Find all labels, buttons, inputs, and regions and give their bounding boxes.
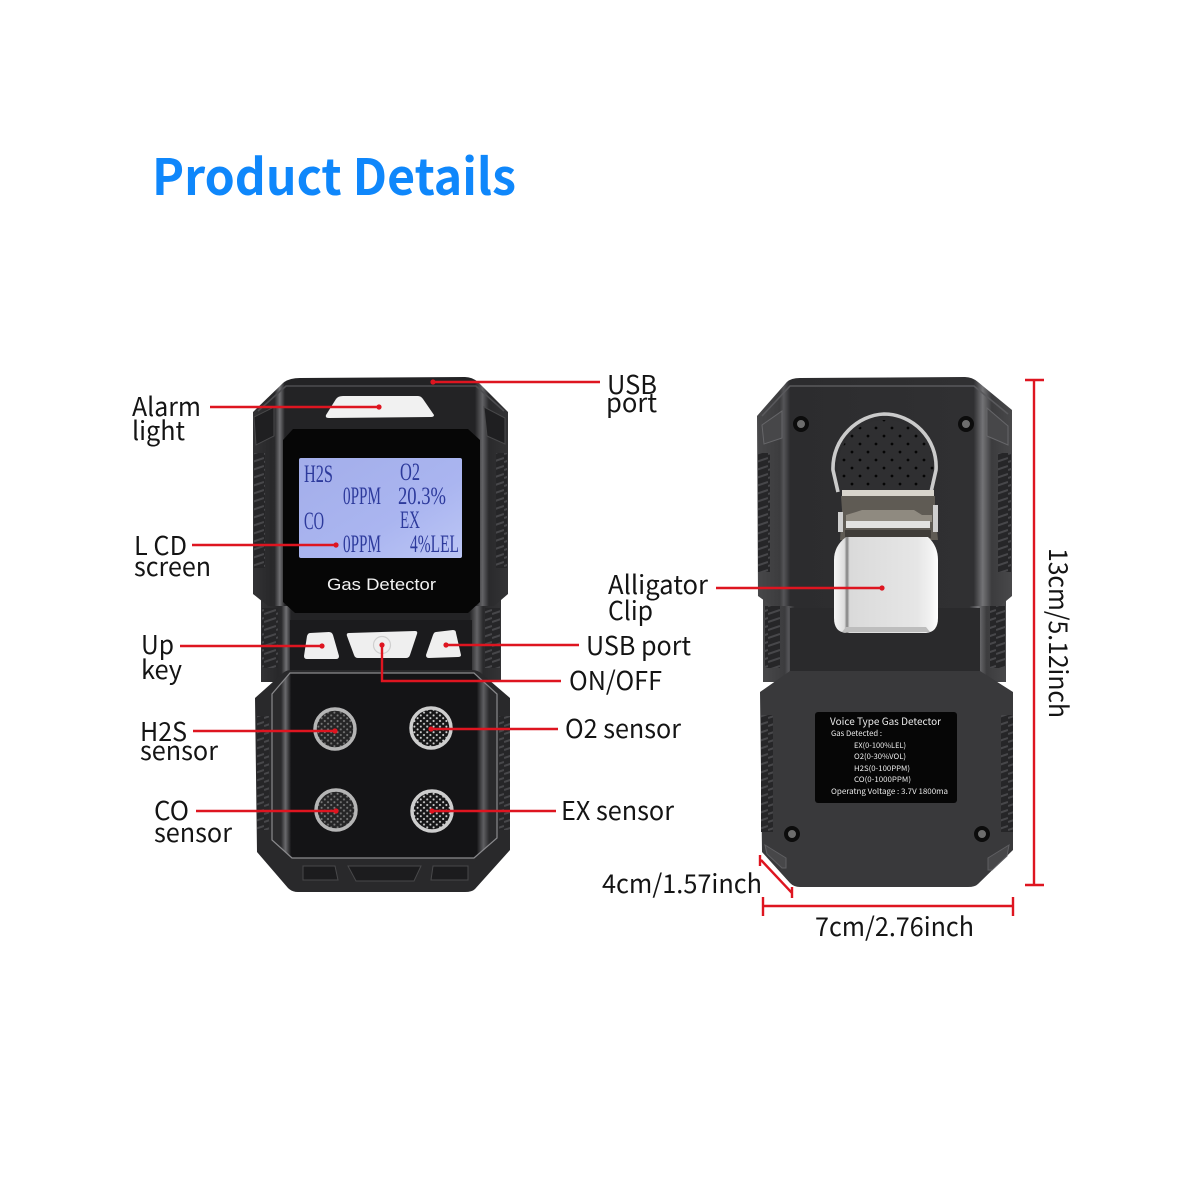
- LCD readings: O2: [400, 459, 420, 486]
- callout: CO sensor: [154, 791, 339, 850]
- LCD readings: 20.3%: [398, 483, 446, 510]
- dimension: depth: [602, 855, 792, 901]
- clip plate: [834, 537, 938, 633]
- screw top left: [795, 418, 807, 430]
- upper side grips: [758, 453, 1011, 572]
- callout: top USB port: [430, 365, 657, 420]
- LCD readings: EX: [400, 507, 420, 534]
- callout: CO sensor: sensor: [154, 813, 233, 850]
- callout: ON/OFF: ON/OFF: [569, 661, 662, 698]
- top edge band: [258, 386, 504, 411]
- callout: USB port key: USB port: [586, 626, 691, 663]
- lower side grips: [257, 716, 510, 830]
- screw bottom right: [976, 828, 988, 840]
- callout: alarm light: Alarm: [132, 387, 201, 424]
- spec text: Operatng Voltage : 3.7V 1800ma: [831, 786, 948, 797]
- middle grip hatching: [262, 608, 500, 668]
- callout: LCD screen: [134, 526, 339, 584]
- callout: LCD screen: screen: [134, 547, 211, 584]
- LCD readings: [304, 459, 459, 558]
- upper body shell: [253, 377, 508, 606]
- upper side grips: [254, 453, 507, 568]
- dimension: width: 7cm/2.76inch: [815, 907, 974, 944]
- alligator clip: [833, 414, 938, 633]
- spec text: CO(0-1000PPM): [854, 774, 911, 785]
- sensor: EX: [412, 791, 452, 831]
- spec text: H2S(0-100PPM): [854, 763, 910, 774]
- spec text: O2(0-30%VOL): [854, 751, 906, 762]
- sensor panel: [272, 673, 497, 858]
- callout: H2S sensor: H2S: [140, 712, 187, 749]
- up key: [304, 632, 339, 659]
- LCD readings: CO: [304, 508, 324, 535]
- back view of gas detector: [757, 377, 1013, 887]
- LCD readings: 4%LEL: [410, 531, 459, 558]
- callout: EX sensor: EX sensor: [561, 791, 675, 828]
- device name: Gas Detector: [327, 575, 436, 594]
- callout: up key: key: [141, 650, 182, 687]
- callout: up key: [141, 625, 325, 687]
- middle grip hatching: [765, 606, 1005, 668]
- power key: [347, 631, 417, 658]
- top corner recesses: [762, 408, 1008, 445]
- screw top right: [960, 418, 972, 430]
- callout: alarm light: [132, 387, 382, 448]
- LCD readings: H2S: [304, 461, 333, 488]
- dimension: width: [763, 897, 1013, 944]
- callout: H2S sensor: [140, 712, 338, 768]
- sensor: CO: [316, 790, 356, 830]
- dimension: height: [1025, 380, 1078, 885]
- right key: [426, 630, 461, 658]
- upper body shell: [757, 377, 1012, 606]
- spec text: Gas Detected :: [831, 728, 882, 739]
- hinge dark band: [845, 530, 931, 538]
- callout: ON/OFF: [379, 642, 662, 698]
- callout: top USB port: USB: [607, 365, 657, 402]
- callout: alarm light: light: [132, 411, 185, 448]
- callout: alligator clip: [608, 565, 885, 628]
- callout: top USB port: port: [606, 383, 657, 420]
- callout: H2S sensor: sensor: [140, 731, 219, 768]
- spec text: EX(0-100%LEL): [854, 740, 906, 751]
- D-ring: [833, 414, 936, 492]
- callout: alligator clip: Alligator: [608, 565, 709, 602]
- hinge bright band: [846, 521, 930, 528]
- dimension: depth: 4cm/1.57inch: [602, 864, 762, 901]
- key strip: [290, 620, 472, 670]
- spec text: [830, 713, 948, 797]
- ring bar: [842, 490, 934, 497]
- LCD readings: 0PPM: [343, 531, 381, 558]
- plate lower edge: [842, 627, 930, 632]
- top edge band: [762, 386, 1008, 416]
- lower body shell: [255, 670, 510, 892]
- alarm light: [326, 396, 434, 418]
- screen bezel: [283, 429, 480, 613]
- callout: CO sensor: CO: [154, 791, 189, 828]
- callout: O2 sensor: [428, 709, 682, 746]
- hinge side tabs: [838, 505, 938, 532]
- speaker grille: [838, 420, 934, 492]
- callout: LCD screen: L CD: [134, 526, 187, 563]
- LCD readings: 0PPM: [343, 483, 381, 510]
- middle centre: [790, 608, 980, 672]
- clip hinge textured: [840, 496, 938, 540]
- corner recesses: [254, 407, 505, 445]
- dimension: height: 13cm/5.12inch: [1041, 548, 1078, 718]
- title: Product Details: [152, 138, 516, 210]
- lower body shell: [760, 671, 1013, 887]
- callout: EX sensor: [429, 791, 675, 828]
- callout: up key: Up: [141, 625, 174, 662]
- callout: USB port key: [443, 626, 691, 663]
- lower side grips: [761, 715, 1013, 832]
- callout: alligator clip: Clip: [608, 591, 653, 628]
- LCD display: [299, 458, 462, 558]
- hinge step: [846, 510, 932, 522]
- callout: O2 sensor: O2 sensor: [565, 709, 682, 746]
- middle body section: [763, 590, 1006, 682]
- bottom recesses: [303, 866, 468, 881]
- spec label: [815, 712, 957, 803]
- screw bottom left: [786, 828, 798, 840]
- spec text: Voice Type Gas Detector: [830, 713, 941, 728]
- middle body section: [261, 590, 501, 682]
- sensor: O2: [411, 708, 451, 748]
- sensor: H2S: [315, 709, 355, 749]
- bottom corner recesses: [765, 845, 1009, 870]
- front view of gas detector: [253, 377, 510, 892]
